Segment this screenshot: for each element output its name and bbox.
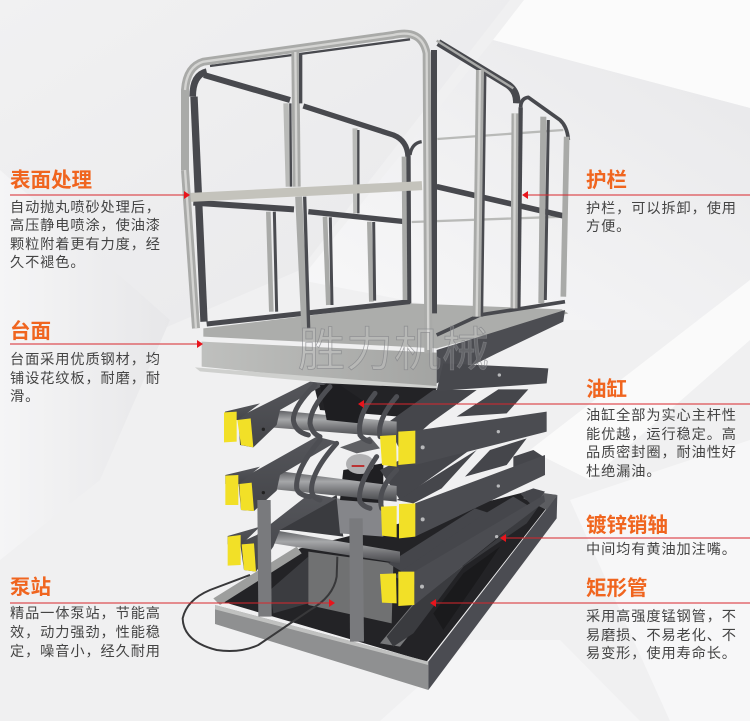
bolts (262, 373, 501, 589)
callout: 护栏: 护栏 (586, 169, 627, 192)
back rails (286, 103, 563, 222)
callout: 油缸 (358, 377, 750, 480)
callout: 台面 (10, 319, 203, 405)
oil cylinder area (313, 383, 437, 418)
callout: 表面处理: 表面处理 (10, 169, 92, 192)
guardrail and platform (185, 34, 568, 393)
callout: 镀锌销轴 (500, 514, 750, 558)
link hoops (293, 385, 397, 508)
callout: 护栏 (522, 169, 750, 235)
yellow end caps (224, 412, 415, 606)
dark inner panels (320, 385, 367, 423)
callout: 泵站: 效，动力强劲，性能稳 (10, 625, 161, 641)
callout: 泵站 (10, 576, 335, 660)
silver members (185, 34, 567, 353)
deck (203, 303, 568, 348)
callout: 矩形管: 易磨损、不易老化、不 (586, 628, 737, 644)
callout: 泵站: 精品一体泵站，节能高 (10, 605, 161, 622)
callout: 矩形管: 采用高强度锰钢管，不 (586, 608, 737, 625)
callout: 油缸: 杜绝漏油。 (586, 464, 661, 480)
lower verticals (268, 117, 543, 312)
dark rails (193, 39, 568, 335)
watermark: 胜力机械 (298, 323, 490, 376)
left arms (225, 382, 337, 572)
platform side (437, 310, 565, 383)
silver highlights (185, 34, 515, 350)
callout: 油缸: 能优越，运行稳定。高 (586, 426, 737, 443)
callout: 镀锌销轴: 中间均有黄油加注嘴。 (586, 541, 737, 558)
callout: 台面: 铺设花纹板，耐磨，耐 (10, 371, 161, 387)
callout: 台面: 台面 (10, 319, 51, 343)
hose (183, 557, 337, 651)
callout: 矩形管: 矩形管 (586, 577, 648, 600)
callout: 泵站: 泵站 (10, 576, 51, 599)
right arms (414, 412, 547, 605)
base frame (213, 491, 557, 690)
callout: 护栏: 护栏，可以拆卸，使用 (586, 200, 737, 217)
platform front (202, 342, 437, 390)
top arm (437, 363, 548, 391)
callout: 表面处理: 颗粒附着更有力度，经 (10, 237, 161, 253)
callout: 矩形管: 易变形，使用寿命长。 (586, 645, 737, 662)
rollers (273, 410, 400, 563)
scissor lift mechanism (183, 363, 557, 690)
callout: 护栏: 方便。 (586, 219, 631, 235)
callout: 油缸: 油缸 (586, 377, 627, 401)
posts (257, 500, 364, 642)
callout: 表面处理: 久不褪色。 (10, 254, 85, 271)
callout: 油缸: 品质密封圈，耐油性好 (586, 444, 737, 461)
callout: 台面: 台面采用优质钢材，均 (10, 352, 161, 368)
callout: 表面处理: 高压静电喷涂，使油漆 (10, 217, 161, 234)
callout: 矩形管 (430, 577, 750, 662)
callout: 泵站: 定，噪音小，经久耐用 (10, 643, 161, 660)
callout: 镀锌销轴: 镀锌销轴 (586, 514, 668, 537)
callout: 油缸: 油缸全部为实心主杆性 (586, 407, 737, 424)
pump unit (270, 437, 393, 623)
diagonal arms (380, 389, 545, 647)
callout: 表面处理 (10, 169, 190, 271)
callout: 表面处理: 自动抛丸喷砂处理后， (10, 200, 161, 216)
callout: 台面: 滑。 (10, 388, 40, 405)
